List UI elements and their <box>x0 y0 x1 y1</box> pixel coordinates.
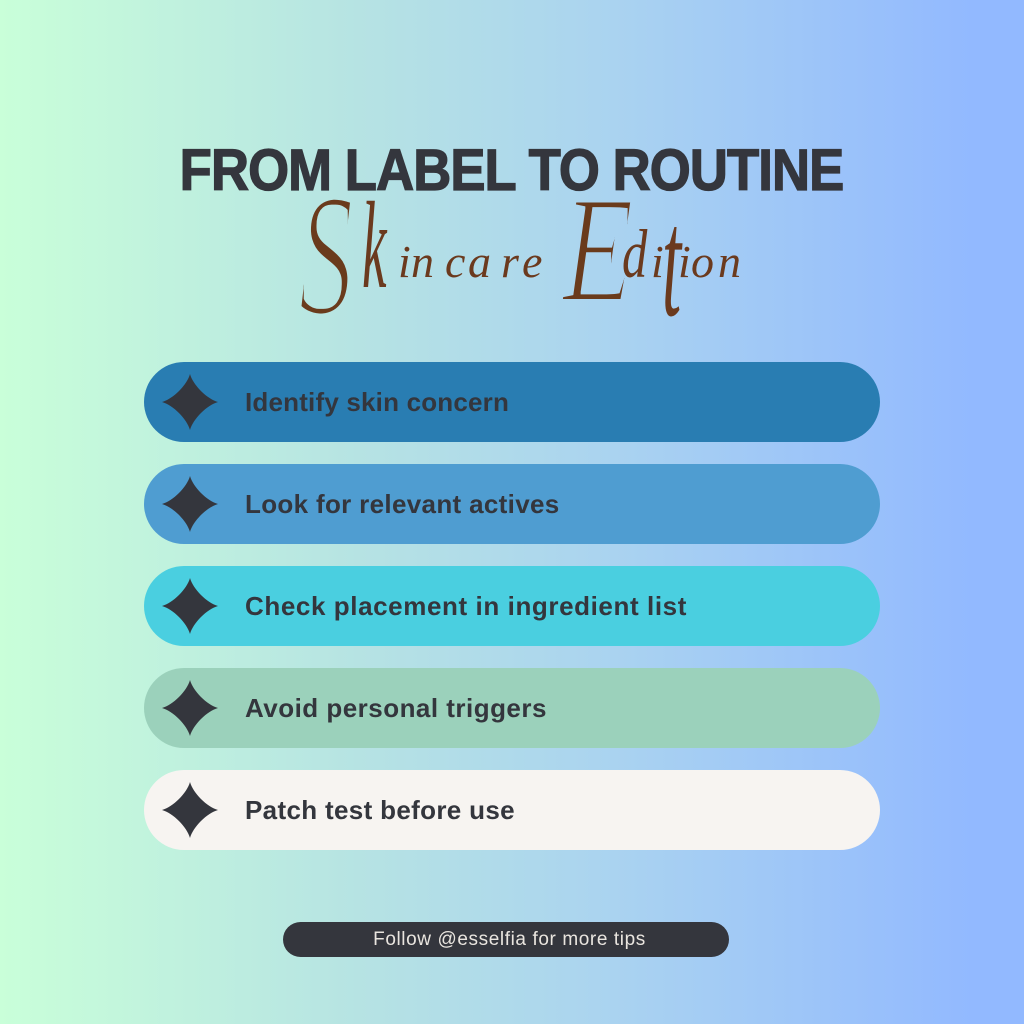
subtitle: E <box>560 167 634 333</box>
subtitle: r <box>501 236 520 287</box>
step 5 pill <box>144 770 880 850</box>
follow footer <box>283 922 729 957</box>
step 3 pill <box>144 566 880 646</box>
subtitle: i <box>651 236 664 287</box>
subtitle: n <box>718 236 741 287</box>
subtitle <box>298 160 741 340</box>
subtitle: c <box>445 236 465 287</box>
step 4 pill: Avoid personal triggers <box>245 693 547 723</box>
title: FROM LABEL TO ROUTINE <box>180 138 843 203</box>
subtitle: d <box>622 217 648 293</box>
subtitle: o <box>691 236 714 287</box>
subtitle: i <box>678 236 691 287</box>
step 2 pill <box>144 464 880 544</box>
follow footer: Follow @esselfia for more tips <box>373 929 646 950</box>
subtitle: k <box>362 176 388 314</box>
step 2 pill: Look for relevant actives <box>245 489 560 519</box>
subtitle: n <box>411 236 434 287</box>
step 1 pill: Identify skin concern <box>245 387 509 417</box>
step 5 pill: Patch test before use <box>245 795 515 825</box>
subtitle: a <box>468 236 491 287</box>
step 1 pill <box>144 362 880 442</box>
subtitle: e <box>522 236 542 287</box>
step 4 pill <box>144 668 880 748</box>
subtitle: i <box>398 236 411 287</box>
step 3 pill: Check placement in ingredient list <box>245 591 687 621</box>
